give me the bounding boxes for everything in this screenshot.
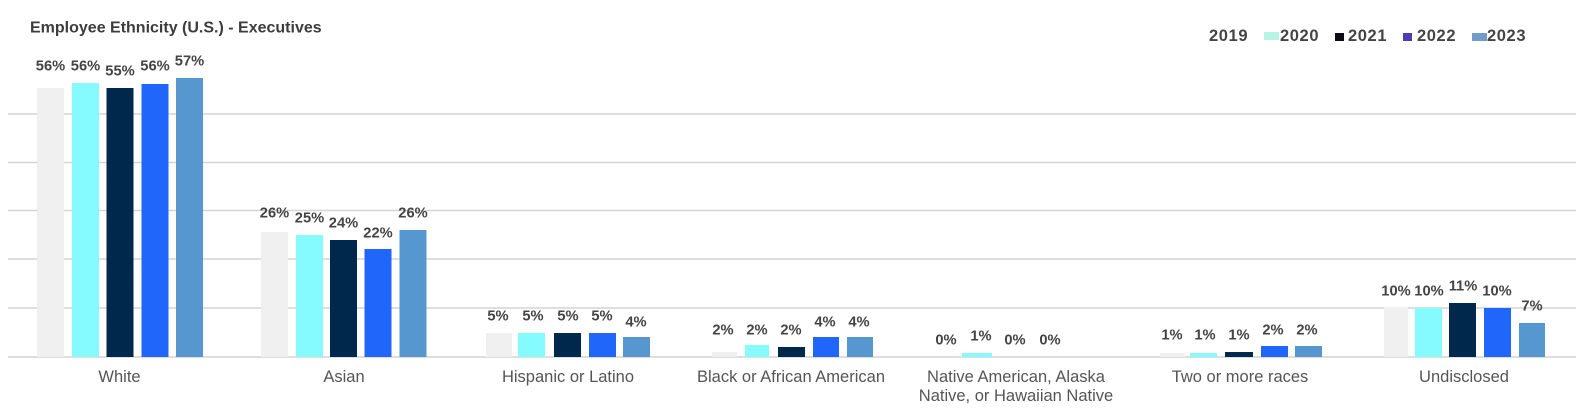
group: Two or more races: 1% — [1161, 327, 1183, 343]
group: White: 55% — [105, 64, 135, 80]
legend — [1209, 27, 1526, 45]
group: Hispanic or Latino: Hispanic or Latino — [502, 368, 634, 386]
group: Asian — [260, 205, 428, 386]
legend: 2022 — [1417, 27, 1456, 45]
group: Two or more races: 2% — [1296, 322, 1318, 338]
group: Asian: 24% — [329, 215, 358, 231]
group: White: 56% — [36, 58, 65, 74]
group: Asian: 22% — [363, 225, 393, 241]
group: Asian: Asian — [323, 368, 365, 386]
group: Native American, Alaska Native, or Hawaiian Native — [919, 328, 1113, 405]
group: Asian: 26% — [398, 205, 428, 221]
group: Hispanic or Latino: 5% — [591, 308, 613, 324]
group: Hispanic or Latino: 4% — [625, 314, 647, 330]
group: Native American, Alaska Native, or Hawaiian Native: Native, or Hawaiian Native — [919, 387, 1113, 405]
group: Black or African American: Black or African American — [697, 368, 885, 386]
legend: 2021 — [1348, 27, 1387, 45]
group: Black or African American — [697, 314, 885, 386]
group: Hispanic or Latino: 5% — [487, 308, 509, 324]
group: Hispanic or Latino: 5% — [522, 308, 544, 324]
group: Asian: 26% — [260, 205, 289, 221]
group: Hispanic or Latino — [486, 308, 650, 386]
legend: 2019 — [1209, 27, 1248, 45]
group: Native American, Alaska Native, or Hawaiian Native: 0% — [1039, 332, 1061, 348]
group: White: 56% — [140, 58, 170, 74]
group: Undisclosed: 11% — [1449, 278, 1477, 294]
group: Black or African American: 4% — [814, 314, 836, 330]
group: Native American, Alaska Native, or Hawaiian Native: 0% — [935, 332, 957, 348]
group: Undisclosed: Undisclosed — [1419, 368, 1509, 386]
group: White — [36, 54, 204, 386]
group: Two or more races — [1160, 322, 1322, 386]
group: Two or more races: 2% — [1262, 322, 1284, 338]
group: Undisclosed: 10% — [1381, 283, 1411, 299]
group: Hispanic or Latino: 5% — [557, 308, 579, 324]
group: Two or more races: Two or more races — [1172, 368, 1308, 386]
group: Undisclosed: 7% — [1521, 298, 1543, 314]
group: Native American, Alaska Native, or Hawaiian Native: 1% — [970, 328, 992, 344]
legend: 2020 — [1280, 27, 1319, 45]
group: Native American, Alaska Native, or Hawaiian Native: Native American, Alaska — [927, 368, 1106, 386]
group: Black or African American: 2% — [712, 322, 734, 338]
group: Two or more races: 1% — [1194, 327, 1216, 343]
group: White: 57% — [175, 54, 204, 70]
group: Black or African American: 4% — [848, 314, 870, 330]
group: Native American, Alaska Native, or Hawaiian Native: 0% — [1004, 332, 1026, 348]
group: Undisclosed: 10% — [1414, 283, 1444, 299]
group: Undisclosed — [1381, 278, 1545, 386]
group: White: White — [98, 368, 141, 386]
group: White: 56% — [71, 58, 100, 74]
group: Black or African American: 2% — [746, 322, 768, 338]
title: Employee Ethnicity (U.S.) - Executives — [30, 20, 322, 36]
legend: 2023 — [1487, 27, 1526, 45]
group: Two or more races: 1% — [1228, 327, 1250, 343]
group: Undisclosed: 10% — [1482, 283, 1512, 299]
group: Asian: 25% — [295, 210, 324, 226]
group: Black or African American: 2% — [780, 322, 802, 338]
